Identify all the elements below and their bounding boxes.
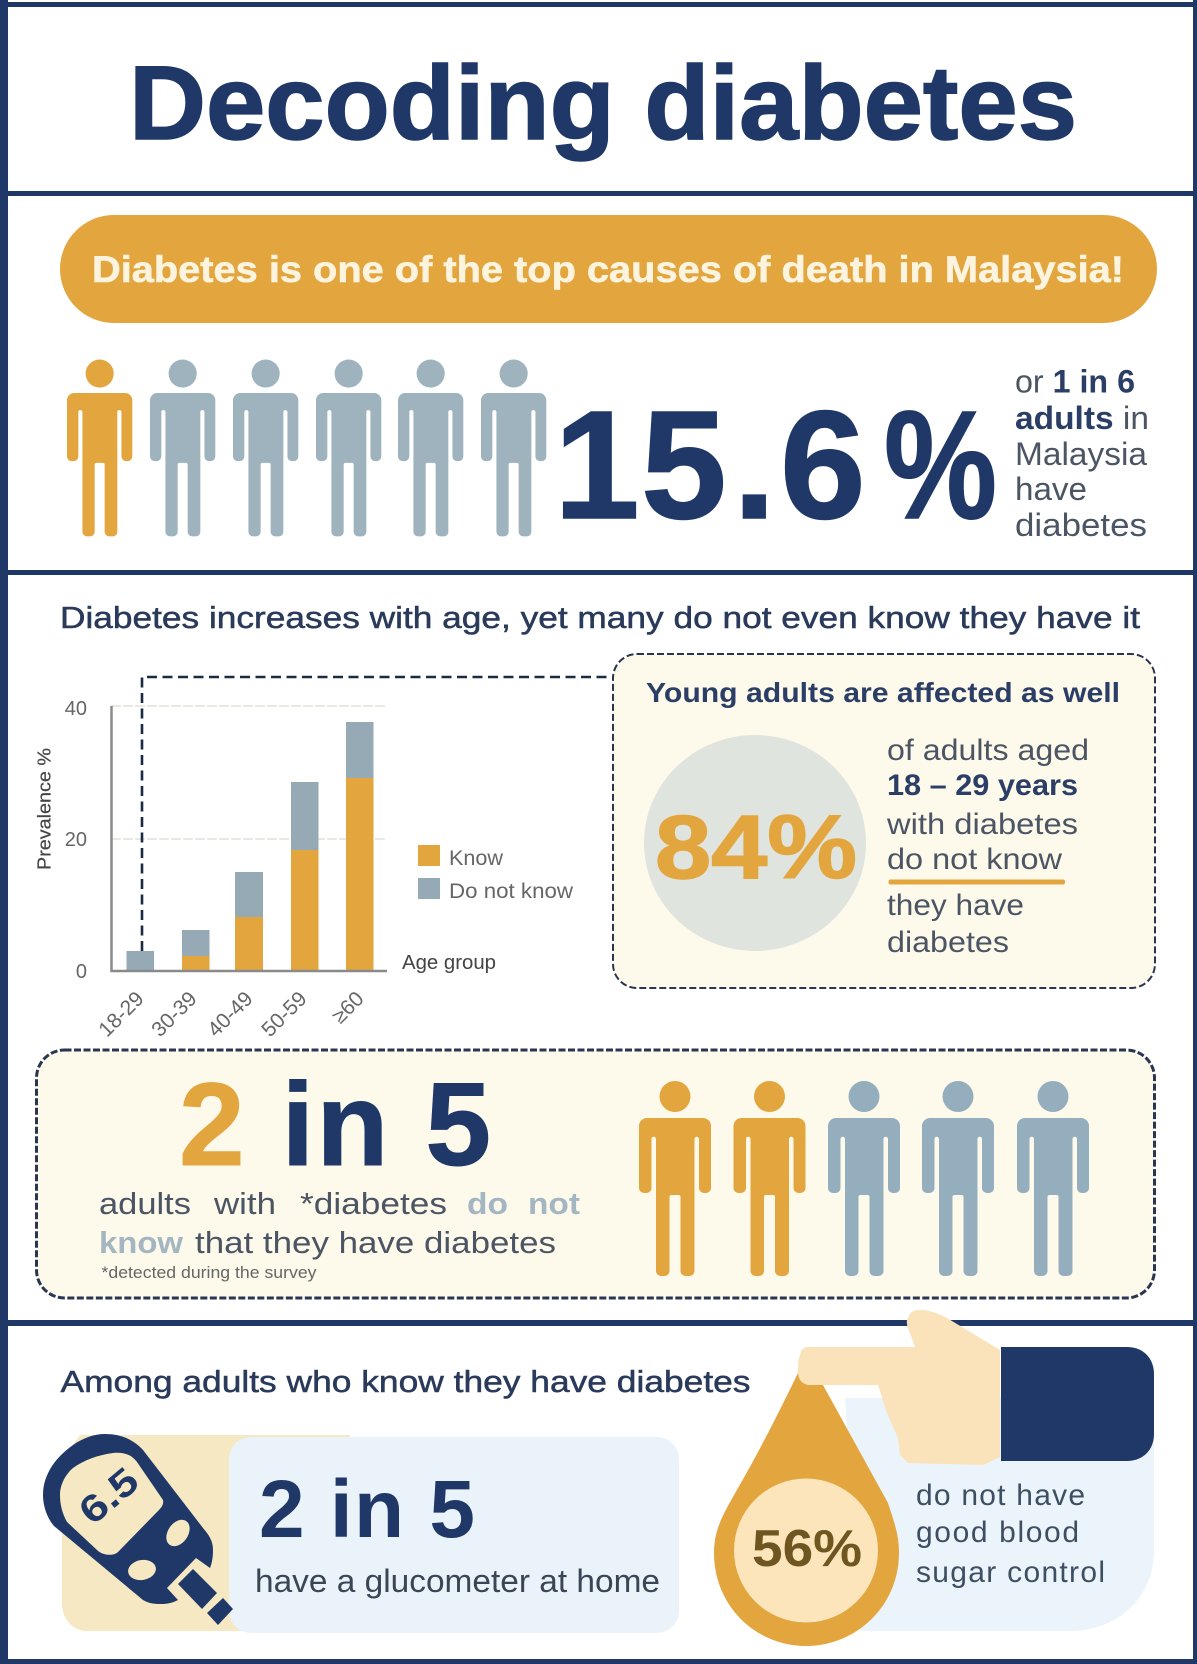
circle stat 84% (644, 735, 866, 951)
blood sugar text: do not have (916, 1479, 1085, 1512)
legend: Know (449, 847, 504, 870)
heading: diabetes increases with age: Diabetes increases with age, yet many do not even know they have it (60, 600, 1140, 635)
panel: blood sugar control (714, 1310, 1154, 1646)
panel: young adults (613, 654, 1155, 988)
x axis labels: ≥60 (328, 987, 369, 1028)
y axis labels: 20 (65, 829, 87, 851)
blood sugar text: sugar control (916, 1556, 1105, 1589)
panel text: do not know (887, 843, 1062, 876)
y axis labels: 0 (76, 961, 87, 983)
x axis labels: 40-49 (203, 987, 258, 1042)
banner pill (60, 215, 1157, 323)
description text: that they have diabetes (195, 1225, 556, 1260)
description text (99, 1186, 580, 1260)
stacked bars (126, 722, 374, 971)
text: or 1 in 6 adults in Malaysia have diabetes: adults in (1015, 400, 1149, 436)
stat circle 56%: 56% (752, 1520, 862, 1578)
x axis labels: 18-29 (94, 987, 149, 1042)
banner pill: Diabetes is one of the top causes of death in Malaysia! (92, 249, 1124, 290)
text: or 1 in 6 adults in Malaysia have diabetes (1015, 364, 1149, 543)
big number 15.6%: % (884, 379, 997, 551)
big number 2 in 5: 2 in 5 (259, 1464, 475, 1555)
bar chart: prevalence by age group (34, 698, 574, 1042)
panel text: they have (887, 889, 1024, 922)
icon: glucometer (43, 1434, 233, 1625)
legend (418, 845, 574, 903)
icon row: 1 in 6 people (67, 360, 546, 536)
x axis title: Age group (402, 952, 496, 974)
text: or 1 in 6 adults in Malaysia have diabetes: have (1015, 471, 1087, 507)
blood sugar text: good blood (916, 1516, 1079, 1549)
y axis labels (65, 698, 87, 983)
description text: with (213, 1186, 276, 1221)
footnote: *detected during the survey (102, 1263, 317, 1282)
text: or 1 in 6 adults in Malaysia have diabetes: Malaysia (1015, 436, 1147, 472)
big number 2 in 5: 2 in 5 (179, 1059, 491, 1191)
icon: pointing hand (798, 1310, 1154, 1465)
legend: Do not know (449, 880, 574, 903)
description text: not (528, 1186, 580, 1221)
stat circle 56% (734, 1478, 878, 1622)
y axis labels: 40 (65, 698, 87, 720)
x axis labels: 30-39 (147, 987, 202, 1042)
circle stat 84%: 84% (655, 798, 857, 898)
panel text (886, 734, 1089, 959)
panel: title (8, 7, 1193, 191)
x axis labels: 50-59 (257, 987, 312, 1042)
icon: glucometer: 6.5 (71, 1460, 147, 1533)
panel text: of adults aged (887, 734, 1089, 767)
text: or 1 in 6 adults in Malaysia have diabetes: diabetes (1015, 507, 1147, 543)
panel: 2 in 5 do not know (36, 1050, 1154, 1298)
blood sugar text (916, 1479, 1105, 1589)
glucometer text: have a glucometer at home (255, 1563, 660, 1599)
panel: glucometer (43, 1434, 679, 1633)
text: or 1 in 6 adults in Malaysia have diabetes: or 1 in 6 (1015, 364, 1135, 400)
description text: know (99, 1225, 184, 1260)
panel heading: Young adults are affected as well (646, 677, 1120, 708)
x axis labels (94, 987, 369, 1042)
description text: adults (99, 1186, 191, 1221)
panel: top cause of death (60, 215, 1157, 551)
title: Decoding diabetes (129, 45, 1077, 162)
panel text: with diabetes (886, 808, 1078, 841)
icon: blood drop (714, 1373, 899, 1646)
icon row: 2 of 5 people (639, 1081, 1089, 1276)
description text: *diabetes (300, 1186, 447, 1221)
connector arrow: chart to young adults panel (142, 677, 612, 951)
panel text: diabetes (887, 926, 1009, 959)
heading: adults who know: Among adults who know they have diabetes (60, 1364, 750, 1399)
description text: do (467, 1186, 508, 1221)
panel text: 18 – 29 years (887, 769, 1078, 802)
big number 15.6%: 15.6 (554, 379, 866, 551)
y axis title: Prevalence % (34, 748, 54, 870)
